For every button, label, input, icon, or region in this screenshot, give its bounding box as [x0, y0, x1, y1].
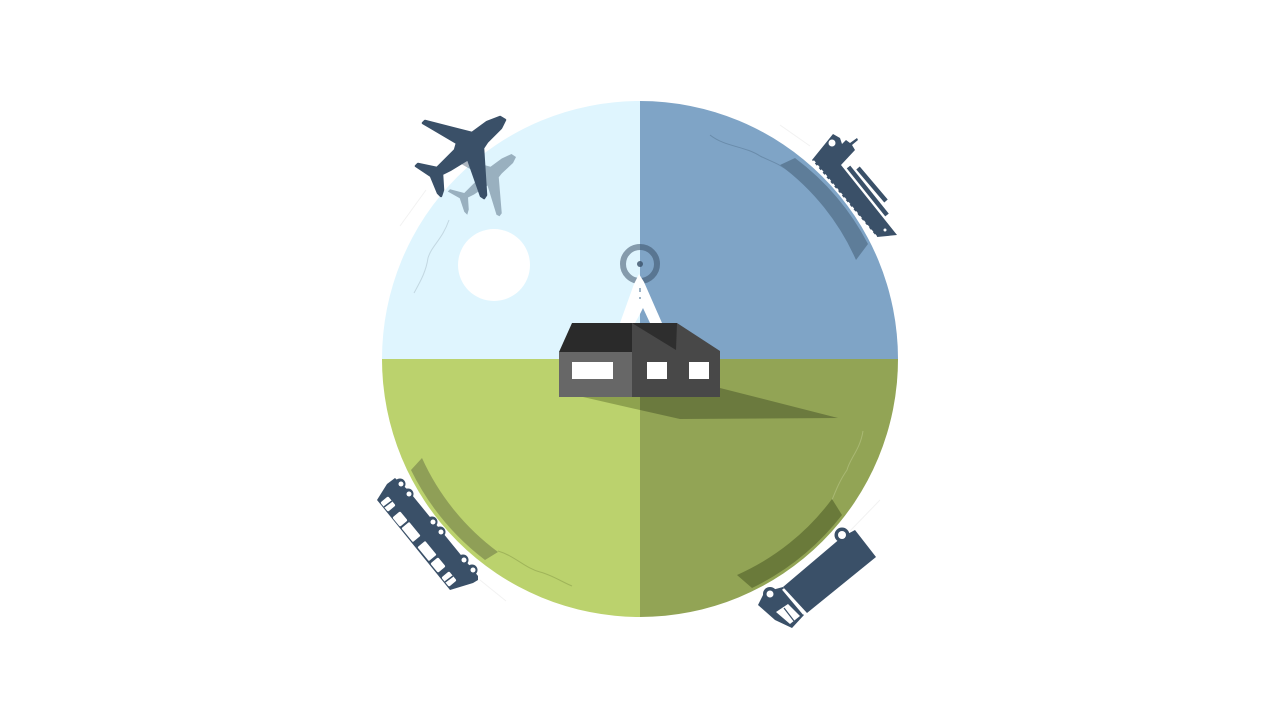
plane [416, 117, 505, 198]
left wall [559, 352, 632, 397]
shadow on light land [583, 397, 640, 410]
shadow on dark land [640, 388, 838, 419]
truck windshield [776, 604, 800, 624]
container row far [858, 168, 886, 201]
tower base gap right [640, 308, 650, 323]
train windows [380, 496, 457, 587]
quadrant: sky [382, 101, 640, 359]
sun [458, 229, 530, 301]
tower [620, 247, 662, 323]
tower signal ring [623, 247, 657, 281]
window left [572, 362, 613, 379]
ship hull [812, 134, 897, 237]
globe [382, 101, 898, 617]
hull serration [813, 161, 877, 238]
cab gap [783, 589, 804, 614]
train wheel hubs [398, 482, 476, 572]
tower base gap left [635, 314, 640, 323]
truck wheel front hub [766, 590, 774, 598]
train window dividers [384, 501, 453, 582]
right roof shade [632, 323, 677, 350]
train wheels [394, 478, 478, 576]
right wall and roof [632, 323, 720, 397]
quadrant: road land [640, 359, 898, 617]
house shadow [583, 388, 838, 419]
vehicle shadow: train [411, 458, 498, 560]
vehicle shadow: truck [737, 499, 842, 588]
left roof [559, 323, 632, 352]
vehicle shadow: ship [780, 158, 868, 260]
ship bow mark [884, 228, 886, 232]
train body [377, 478, 478, 590]
truck wheel rear hub [838, 531, 846, 539]
windshield mullion [784, 608, 794, 621]
ship [812, 134, 897, 238]
plane shadow [448, 154, 516, 216]
window right [689, 362, 709, 379]
ship porthole [828, 140, 836, 146]
truck cargo box [783, 530, 876, 613]
truck wheel front [763, 587, 777, 601]
truck wheel rear [834, 528, 850, 542]
house [559, 323, 720, 397]
container row near [848, 167, 887, 215]
window middle [647, 362, 667, 379]
truck cab [758, 587, 804, 628]
quadrant: land [382, 359, 640, 617]
train [377, 478, 478, 590]
tower signal dot [637, 261, 643, 267]
tower rivets [639, 288, 641, 298]
quadrant: sea [640, 101, 898, 359]
tower mast [620, 274, 662, 323]
truck [758, 528, 876, 628]
